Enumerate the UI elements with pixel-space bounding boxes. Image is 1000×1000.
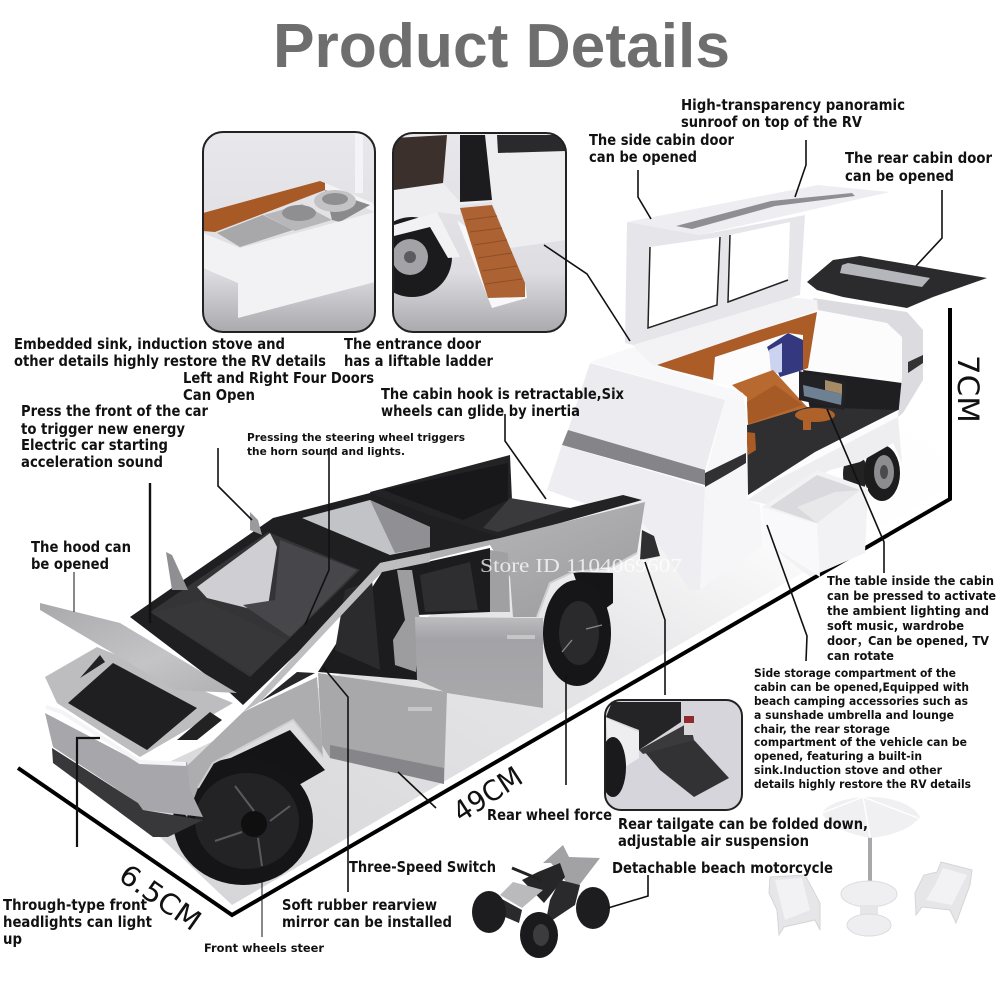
label: embedded sink: other details highly restore the RV details xyxy=(14,352,326,370)
front hood bay xyxy=(45,647,233,757)
a pillar xyxy=(243,553,430,712)
label: sunroof: sunroof on top of the RV xyxy=(681,113,862,131)
label: side storage: cabin can be opened,Equipped with xyxy=(754,680,969,694)
label: rearview mirror xyxy=(282,896,452,931)
cabin floor xyxy=(747,407,898,495)
label: headlights: headlights can light xyxy=(3,913,152,931)
label: motorcycle: Detachable beach motorcycle xyxy=(612,859,833,877)
label: headlights xyxy=(3,896,152,948)
label: sunroof xyxy=(681,96,905,131)
label: tailgate: Rear tailgate can be folded down, xyxy=(618,815,868,833)
rear door xyxy=(415,617,543,708)
label: four doors xyxy=(183,369,374,404)
label: cabin hook: The cabin hook is retractable,Six xyxy=(381,385,624,403)
cabin back wall xyxy=(803,370,902,410)
label: side storage xyxy=(754,666,971,791)
truck bed xyxy=(370,455,642,560)
watermark: Store ID 1104069607 xyxy=(480,555,682,577)
label: tailgate xyxy=(618,815,868,850)
rv rear wheels xyxy=(843,445,900,501)
front door xyxy=(318,673,447,784)
label: sunroof: High-transparency panoramic xyxy=(681,96,905,114)
inset: ladder xyxy=(372,133,566,332)
label: side storage: opened, featuring a built-in xyxy=(754,749,922,763)
label: press front: acceleration sound xyxy=(21,453,163,471)
beach chair left xyxy=(769,875,820,935)
rear wheel xyxy=(543,580,611,686)
label: tailgate: adjustable air suspension xyxy=(618,832,809,850)
front trunk xyxy=(68,663,197,750)
label: steering wheel: Pressing the steering wheel triggers xyxy=(247,432,465,444)
storage box xyxy=(762,470,868,577)
wheel arch xyxy=(205,730,325,800)
rear side panel xyxy=(380,502,645,617)
side mirrors xyxy=(166,512,262,590)
raised sunroof xyxy=(627,185,890,235)
label: hood xyxy=(31,538,131,573)
raised side door xyxy=(625,215,805,345)
hinge bar xyxy=(633,297,818,372)
label: side cabin door: can be opened xyxy=(589,148,697,166)
label: side storage: Side storage compartment of the xyxy=(754,666,956,680)
rv coupler xyxy=(640,530,660,560)
sofa xyxy=(732,370,807,455)
table xyxy=(795,408,835,430)
label: entrance door: has a liftable ladder xyxy=(344,352,494,370)
label: press front: Electric car starting xyxy=(21,436,168,454)
front wheel xyxy=(173,757,313,885)
windshield glass xyxy=(150,532,360,677)
label: side cabin door xyxy=(589,131,735,166)
cowl gap xyxy=(260,672,315,702)
cabin window opening xyxy=(657,306,907,495)
leader lines xyxy=(74,140,942,937)
label: rear cabin door xyxy=(845,149,993,185)
label: rear wheel force: Rear wheel force xyxy=(487,806,612,824)
hood xyxy=(40,603,237,693)
label: rearview mirror: mirror can be installed xyxy=(282,913,452,931)
rv front wall xyxy=(568,363,725,470)
ambient light panel xyxy=(767,333,803,377)
label: side cabin door: The side cabin door xyxy=(589,131,735,149)
beach umbrella table xyxy=(822,797,920,936)
RV trailer xyxy=(547,185,987,590)
rv stripe xyxy=(562,430,705,485)
label: cabin hook xyxy=(381,385,624,420)
inset: tailgate xyxy=(600,700,742,810)
label: headlights: up xyxy=(3,930,22,948)
label: rear cabin door: can be opened xyxy=(845,167,954,185)
label: table: the ambient lighting and xyxy=(827,603,989,618)
front wall top xyxy=(590,347,743,400)
vents xyxy=(80,655,222,740)
rear arch shadow xyxy=(573,572,613,620)
label: embedded sink xyxy=(14,335,326,370)
dimension lines xyxy=(18,308,950,915)
rv lower front xyxy=(547,445,705,590)
label: embedded sink: Embedded sink, induction stove and xyxy=(14,335,285,353)
label: entrance door xyxy=(344,335,494,370)
label: hood: be opened xyxy=(31,555,109,573)
roof and windshield frame xyxy=(130,493,500,705)
cybertruck xyxy=(40,455,682,885)
dimension: 6.5CM: 6.5CM xyxy=(113,858,207,938)
label: headlights: Through-type front xyxy=(3,896,147,914)
skirt xyxy=(52,748,203,837)
cabin interior xyxy=(318,548,490,680)
label: front wheels steer: Front wheels steer xyxy=(204,941,324,955)
b pillar xyxy=(393,570,420,672)
label: press front xyxy=(21,402,209,471)
label: table: soft music, wardrobe xyxy=(827,618,964,633)
tv xyxy=(799,371,846,410)
label: entrance door: The entrance door xyxy=(344,335,482,353)
floor shadow xyxy=(110,420,945,905)
label: side storage: a sunshade umbrella and lounge xyxy=(754,708,954,722)
c pillar xyxy=(490,550,510,612)
fender xyxy=(140,677,323,817)
title: Product Details xyxy=(273,12,730,81)
label: side storage: chair, the rear storage xyxy=(754,722,890,736)
label: table: door，Can be opened, TV xyxy=(827,633,989,648)
rear door lid xyxy=(807,256,987,308)
label: side storage: beach camping accessories such as xyxy=(754,694,968,708)
label: press front: Press the front of the car xyxy=(21,402,209,420)
label: side storage: sink.Induction stove and other xyxy=(754,763,942,777)
cabinets xyxy=(657,312,817,380)
inset: embedded sink xyxy=(203,132,375,332)
label: steering wheel xyxy=(247,432,465,458)
rear frame xyxy=(813,298,923,417)
label: table xyxy=(827,573,996,663)
label: side storage: details highly restore the RV details xyxy=(754,777,971,791)
label: hood: The hood can xyxy=(31,538,131,556)
label: three speed switch: Three-Speed Switch xyxy=(349,858,496,876)
dimension: 49CM: 49CM xyxy=(447,760,529,829)
label: four doors: Can Open xyxy=(183,386,255,404)
beach motorcycle xyxy=(472,845,610,958)
front bumper xyxy=(45,713,203,817)
label: table: can rotate xyxy=(827,648,894,663)
label: rearview mirror: Soft rubber rearview xyxy=(282,896,437,914)
label: side storage: compartment of the vehicle can be xyxy=(754,735,967,749)
side skirt xyxy=(747,417,902,505)
headlight strip xyxy=(46,707,186,764)
beach chair right xyxy=(915,862,972,923)
label: four doors: Left and Right Four Doors xyxy=(183,369,374,387)
roof glass xyxy=(302,500,430,555)
label: press front: to trigger new energy xyxy=(21,420,185,438)
label: steering wheel: the horn sound and lights. xyxy=(247,446,405,458)
dimension: 7CM: 7CM xyxy=(951,355,985,423)
label: cabin hook: wheels can glide by inertia xyxy=(381,402,580,420)
